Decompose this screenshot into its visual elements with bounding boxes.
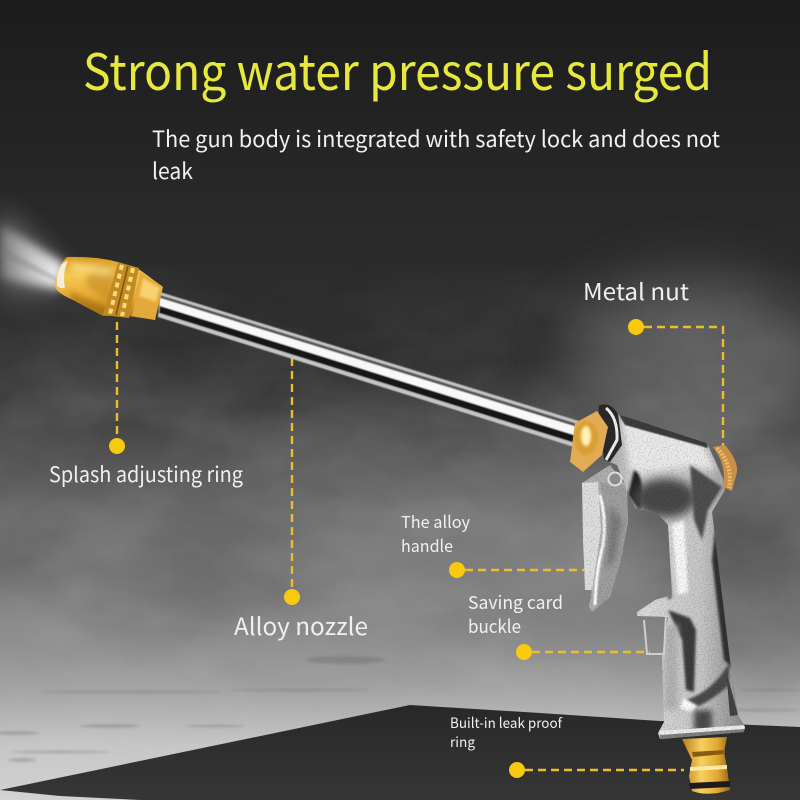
label: splash adjusting ring: Splash adjusting ring (49, 459, 243, 489)
label: alloy nozzle: Alloy nozzle (234, 607, 368, 642)
label: metal nut: Metal nut (583, 273, 689, 307)
label: saving card buckle: Saving card (468, 589, 563, 615)
subtitle (152, 122, 720, 186)
brass nozzle head (55, 257, 163, 320)
subtitle: leak (152, 154, 194, 186)
label: the alloy handle: The alloy (401, 509, 470, 533)
brass front nut (570, 411, 608, 472)
steel barrel (158, 292, 582, 447)
subtitle: The gun body is integrated with safety lock and does not (152, 122, 720, 154)
safety lock buckle (644, 615, 666, 654)
title: Strong water pressure surged (83, 33, 712, 105)
water spray (0, 204, 64, 296)
label: saving card buckle (468, 589, 563, 639)
dashed leader lines (117, 322, 723, 770)
spray gun (55, 257, 745, 794)
background (0, 167, 800, 800)
brass hose connector (682, 737, 730, 794)
brass knurled rear nut (713, 445, 737, 491)
label: the alloy handle (401, 509, 470, 557)
label: built-in leak proof ring: Built-in leak proof (450, 713, 562, 733)
icon: pivot screw (608, 472, 622, 486)
trigger lever (582, 465, 630, 612)
label: the alloy handle: handle (401, 533, 453, 557)
label: built-in leak proof ring: ring (450, 732, 475, 752)
label: saving card buckle: buckle (468, 613, 521, 639)
icon: callout dots (109, 319, 644, 778)
metal gun body (598, 403, 745, 739)
dark ground (0, 705, 800, 800)
label: built-in leak proof ring (450, 713, 562, 752)
